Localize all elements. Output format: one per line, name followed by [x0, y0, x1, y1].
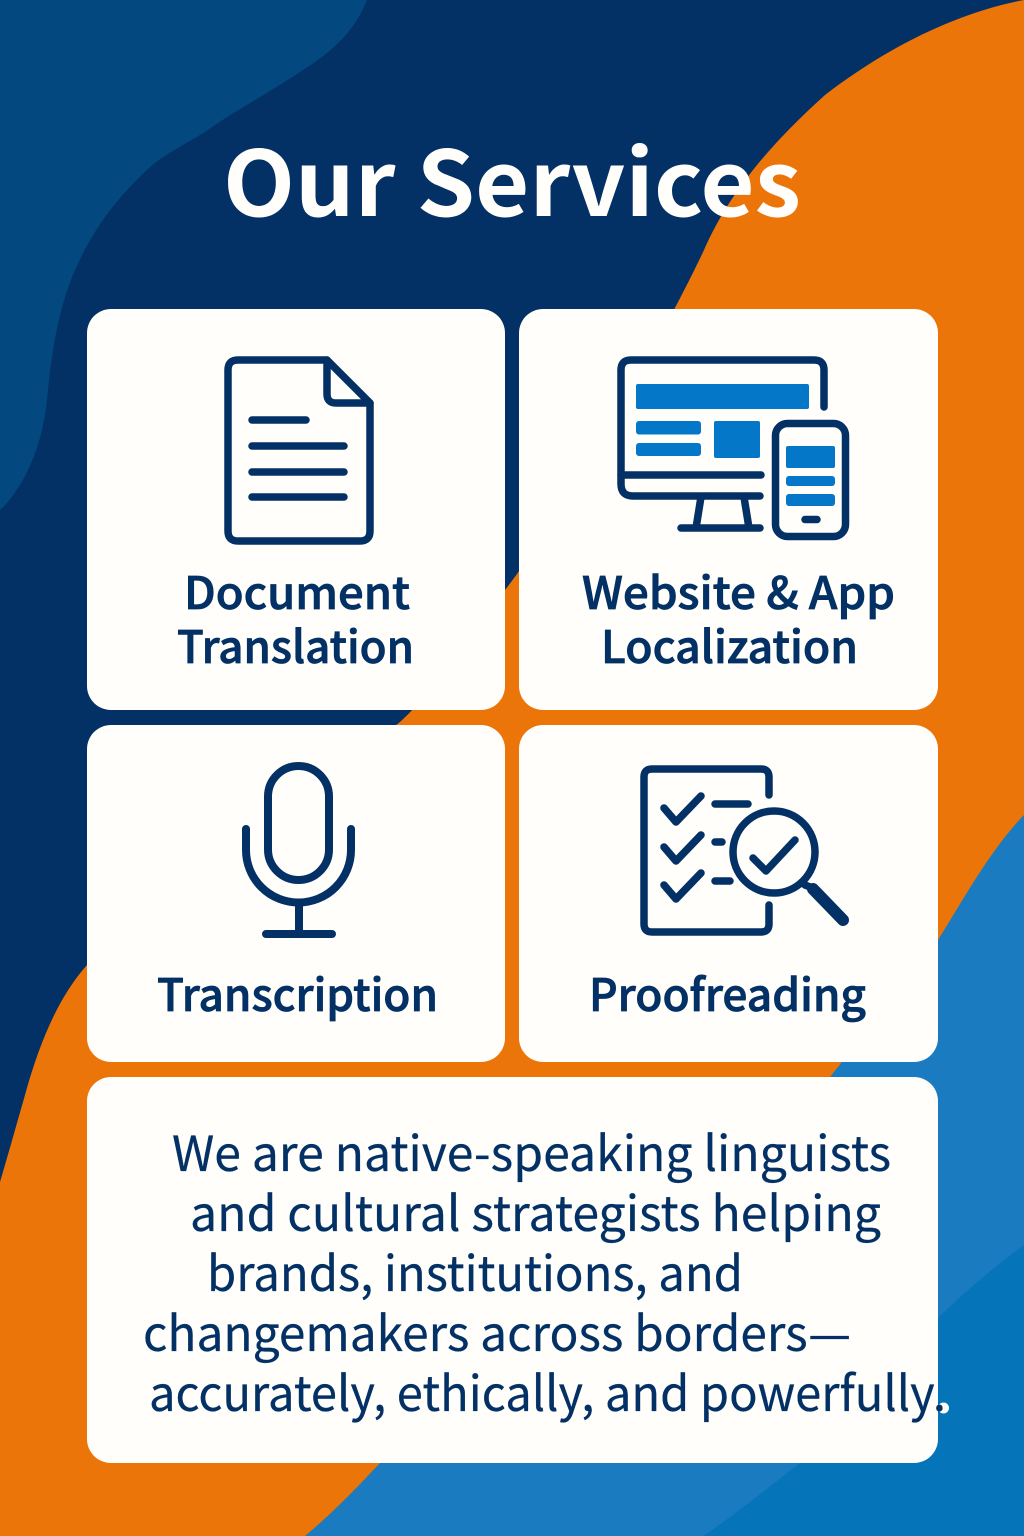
title: Our Services [223, 112, 801, 242]
label: website and app localization [582, 557, 895, 676]
label: website and app localization: Website & App [582, 557, 895, 622]
text block: about statement: We are native-speaking linguists [172, 1115, 891, 1185]
text block: about statement: and cultural strategists helping [190, 1175, 881, 1245]
text block: about statement [143, 1115, 949, 1425]
panel: proofreading [519, 725, 938, 1062]
label: document translation: Translation [177, 611, 414, 676]
label: transcription: Transcription [157, 959, 438, 1024]
icon: checklist with magnifier [644, 769, 843, 932]
panel: transcription [87, 725, 505, 1062]
label: proofreading: Proofreading [589, 959, 866, 1024]
panel: website and app localization [519, 309, 938, 710]
label: website and app localization: Localization [601, 611, 858, 676]
panel: document translation [87, 309, 505, 710]
text block: about statement: changemakers across borders— [143, 1295, 851, 1365]
icon: monitor and phone [621, 360, 846, 536]
icon: microphone [246, 766, 351, 934]
text block: about statement: accurately, ethically, and powerfully. [149, 1355, 946, 1425]
icon: document [228, 360, 370, 541]
panel: about statement [87, 1077, 949, 1463]
label: document translation [177, 557, 414, 676]
label: document translation: Document [184, 557, 410, 622]
text block: about statement: brands, institutions, and [207, 1235, 743, 1305]
